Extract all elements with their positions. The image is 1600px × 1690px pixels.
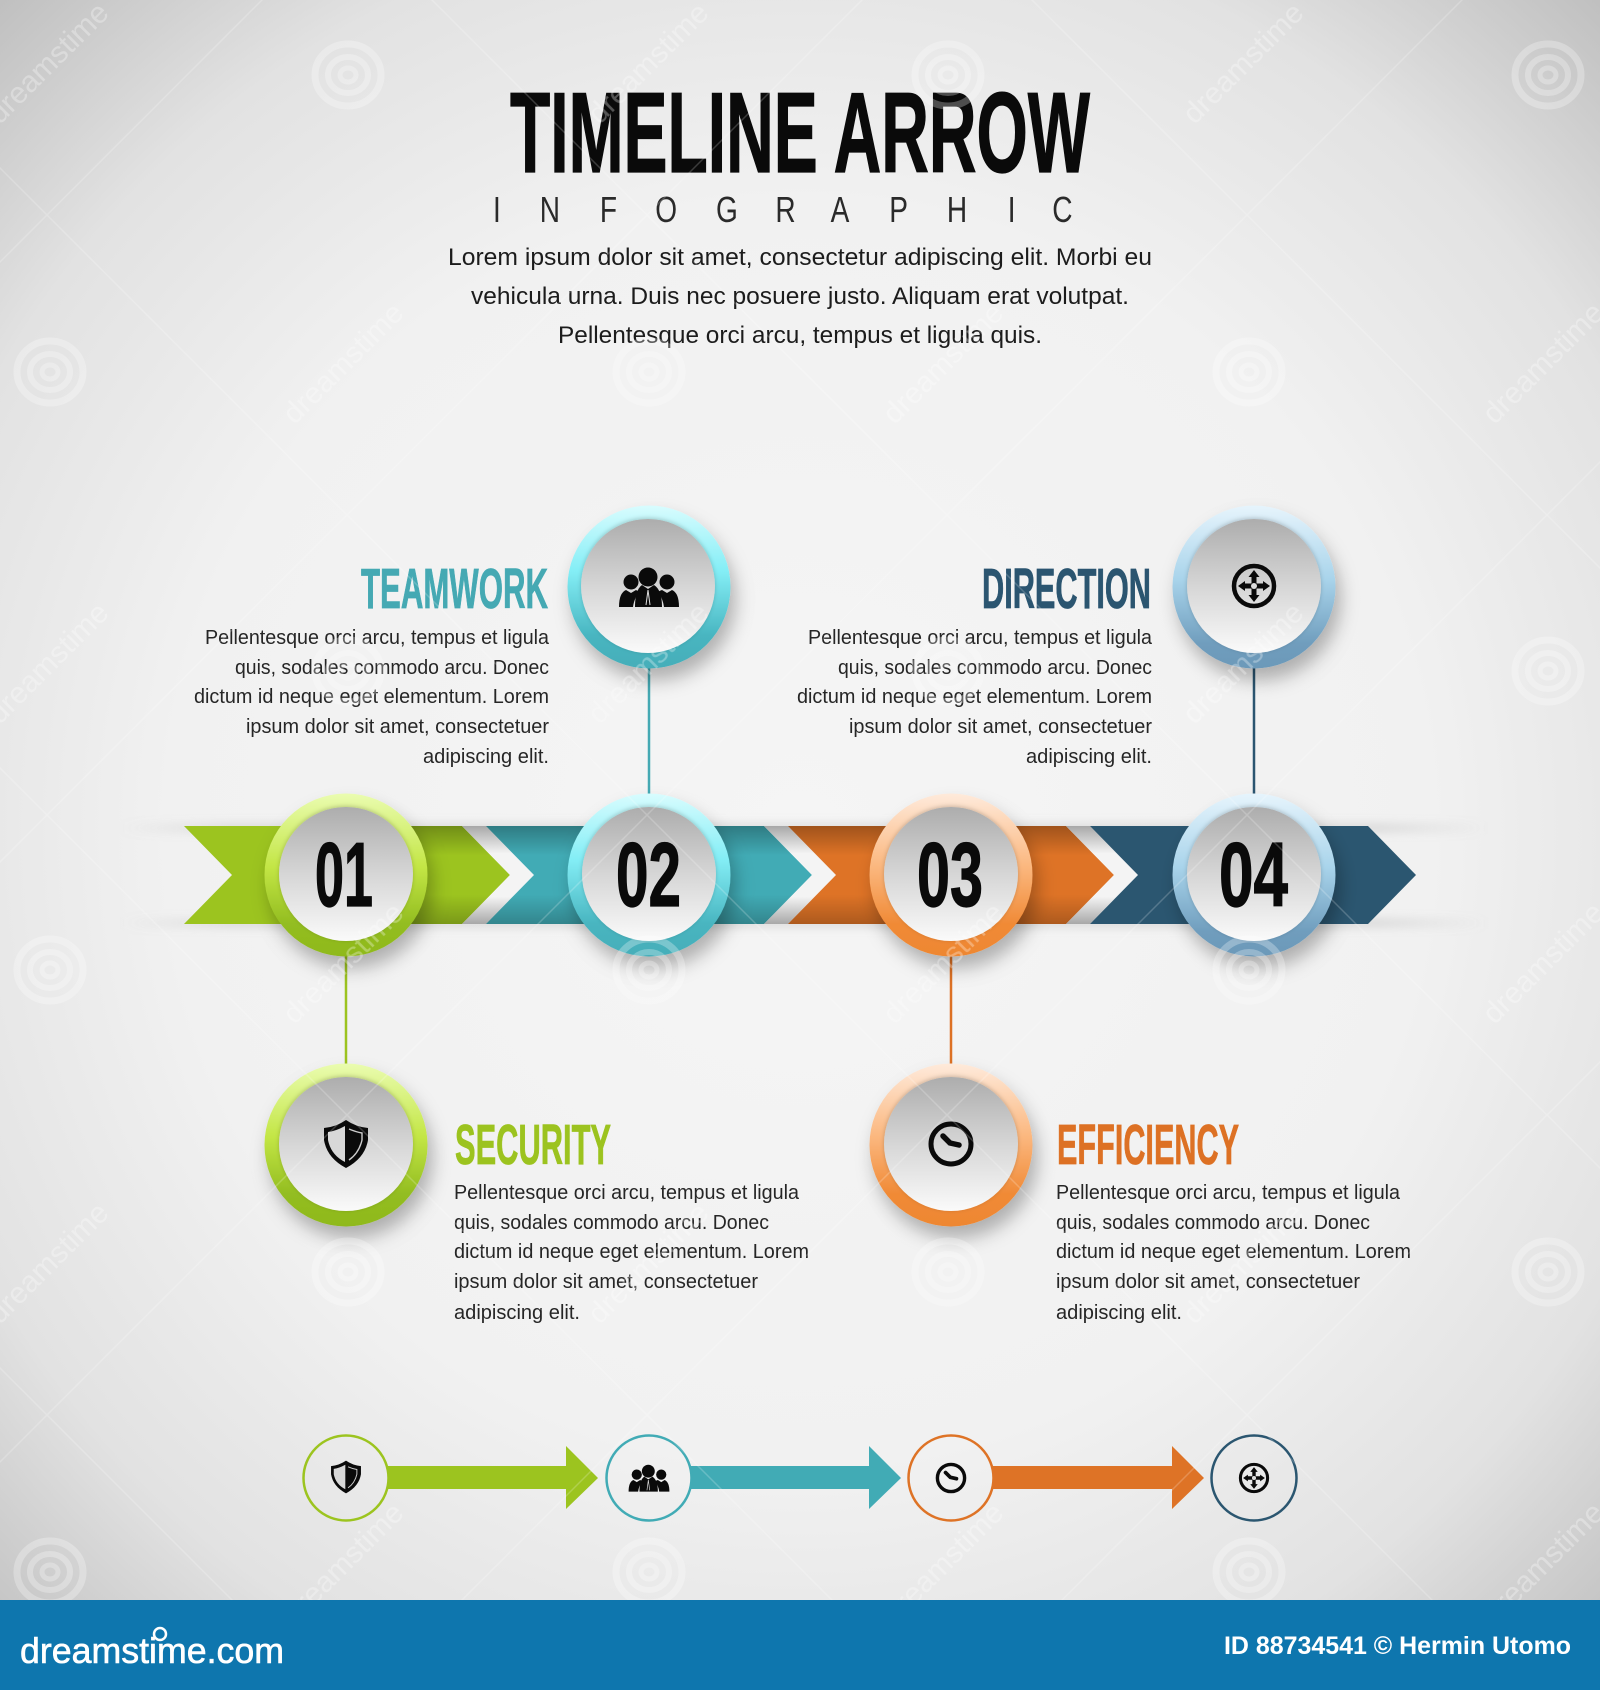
watermark pattern: dreamstime (876, 296, 1010, 430)
text block: teamwork: quis, sodales commodo arcu. Donec (235, 656, 549, 679)
logo: dreamstime.com: dreamstime.com (20, 1630, 284, 1671)
text block: teamwork: adipiscing elit. (423, 745, 549, 768)
text block: direction (797, 626, 1153, 768)
timeline arrow band (184, 826, 1416, 924)
text block: direction: ipsum dolor sit amet, consectetuer (849, 715, 1152, 738)
text block: direction: dictum id neque eget elementum. Lorem (797, 685, 1152, 708)
panel: teamwork (194, 557, 550, 768)
step 01 circle (264, 794, 428, 956)
text block: teamwork: ipsum dolor sit amet, consectetuer (246, 715, 549, 738)
step 04 circle: 04 (1219, 825, 1288, 926)
segment: teal (486, 826, 812, 924)
panel: efficiency (1056, 1113, 1411, 1324)
step 02 circle: 02 (616, 825, 681, 926)
watermark pattern: dreamstime (581, 0, 715, 130)
watermark pattern: dreamstime (276, 1496, 410, 1630)
step 04 circle (1172, 794, 1336, 956)
watermark pattern: dreamstime (1176, 1196, 1310, 1330)
text block: teamwork: Pellentesque orci arcu, tempus et ligula (205, 626, 550, 649)
text block: efficiency: dictum id neque eget elementum. Lorem (1056, 1240, 1411, 1263)
arrow band shadow streaks (120, 825, 1488, 926)
text block: direction: Pellentesque orci arcu, tempus et ligula (808, 626, 1153, 649)
intro text (448, 244, 1152, 349)
text block: teamwork (194, 626, 550, 768)
mini icon: efficiency (908, 1436, 994, 1520)
text block: security: Pellentesque orci arcu, tempus et ligula (454, 1181, 800, 1204)
mini icon: direction (1212, 1436, 1296, 1520)
segment: green (184, 826, 510, 924)
watermark pattern: dreamstime (1176, 0, 1310, 130)
watermark pattern: dreamstime (276, 296, 410, 430)
icon circle: direction (1172, 506, 1336, 668)
step 01 circle: 01 (315, 825, 373, 926)
step 03 circle: 03 (917, 825, 983, 926)
heading: teamwork: TEAMWORK (361, 557, 548, 621)
text block: security (454, 1181, 809, 1324)
icon circle: security (264, 1064, 428, 1226)
watermark pattern: dreamstime (276, 896, 410, 1030)
text block: efficiency (1056, 1181, 1411, 1324)
mini icon: security (304, 1436, 388, 1520)
intro text: Pellentesque orci arcu, tempus et ligula quis. (558, 322, 1042, 349)
text block: efficiency: ipsum dolor sit amet, consectetuer (1056, 1270, 1360, 1293)
panel: direction (797, 557, 1153, 768)
text block: security: ipsum dolor sit amet, consectetuer (454, 1270, 758, 1293)
chevron gap 1 (462, 826, 534, 924)
text block: security: quis, sodales commodo arcu. Donec (454, 1211, 769, 1234)
chevron gap 2 (764, 826, 836, 924)
watermark pattern: dreamstime (581, 1196, 715, 1330)
text block: efficiency: quis, sodales commodo arcu. Donec (1056, 1211, 1370, 1234)
text block: security: dictum id neque eget elementum. Lorem (454, 1240, 809, 1263)
text block: efficiency: adipiscing elit. (1056, 1301, 1182, 1324)
title: TIMELINE ARROW (510, 70, 1090, 197)
text block: security: adipiscing elit. (454, 1301, 580, 1324)
watermark pattern: dreamstime (876, 1496, 1010, 1630)
intro text: Lorem ipsum dolor sit amet, consectetur adipiscing elit. Morbi eu (448, 244, 1152, 271)
mini timeline (304, 1436, 1296, 1520)
heading: security: SECURITY (455, 1113, 611, 1177)
watermark pattern: dreamstime (1176, 596, 1310, 730)
chevron gap 3 (1066, 826, 1138, 924)
text block: direction: adipiscing elit. (1026, 745, 1152, 768)
step 03 circle (870, 794, 1032, 956)
step 02 circle (568, 794, 730, 956)
arrow: orange (993, 1446, 1204, 1509)
watermark pattern: dreamstime (876, 896, 1010, 1030)
intro text: vehicula urna. Duis nec posuere justo. Aliquam erat volutpat. (471, 283, 1129, 310)
arrow: green (388, 1446, 598, 1509)
heading: efficiency: EFFICIENCY (1057, 1113, 1239, 1177)
heading: direction: DIRECTION (982, 557, 1151, 621)
text block: efficiency: Pellentesque orci arcu, tempus et ligula (1056, 1181, 1401, 1204)
segment: navy (1090, 826, 1416, 924)
watermark pattern: dreamstime (581, 596, 715, 730)
arrow: teal (691, 1446, 901, 1509)
mini icon: teamwork (606, 1436, 692, 1520)
image id credit: ID 88734541 © Hermin Utomo (1224, 1632, 1571, 1660)
connector lines (346, 665, 1254, 1066)
subtitle: INFOGRAPHIC (493, 190, 1072, 230)
footer bar (0, 1600, 1600, 1690)
icon circle: efficiency (870, 1064, 1032, 1226)
icon circle: teamwork (568, 506, 730, 668)
panel: security (454, 1113, 809, 1324)
text block: direction: quis, sodales commodo arcu. Donec (838, 656, 1152, 679)
segment: orange (788, 826, 1114, 924)
text block: teamwork: dictum id neque eget elementum. Lorem (194, 685, 549, 708)
